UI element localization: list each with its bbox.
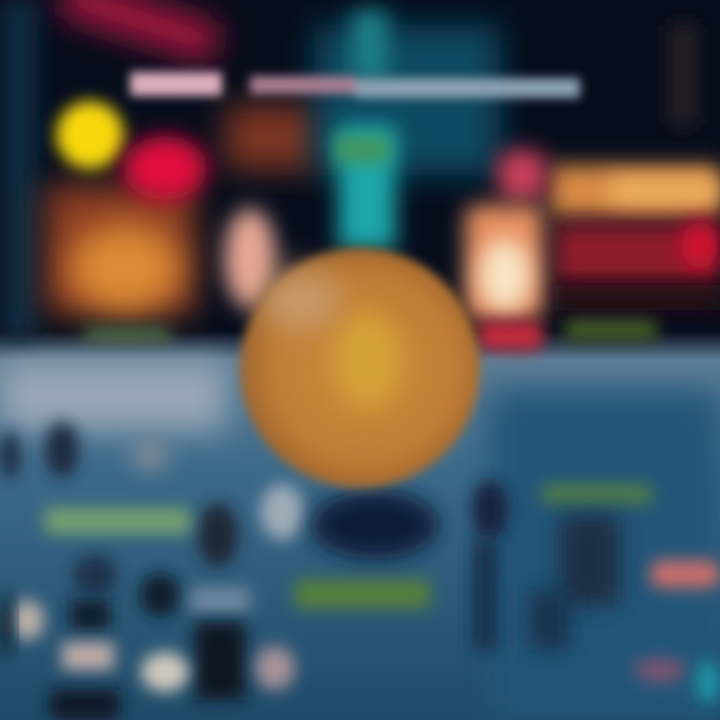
panel: lower-left figures <box>0 362 304 720</box>
panel: right banner <box>550 165 720 310</box>
panel: upper left glow <box>45 0 320 315</box>
coin pedestal <box>311 491 439 559</box>
label: centre green <box>295 580 430 608</box>
icon: red circle <box>123 136 207 200</box>
icon: right bottle <box>465 150 546 350</box>
icon: orange circle <box>69 224 181 312</box>
heading <box>130 72 580 98</box>
icon: large gold coin <box>240 248 480 488</box>
panel: central teal tower <box>315 10 500 250</box>
icon: pale figure <box>224 208 276 308</box>
icon: yellow circle <box>56 101 124 169</box>
label: right green <box>565 320 657 340</box>
wire on the right <box>670 25 696 125</box>
label: left green <box>85 327 170 343</box>
panel: lower-right figures <box>472 480 720 704</box>
